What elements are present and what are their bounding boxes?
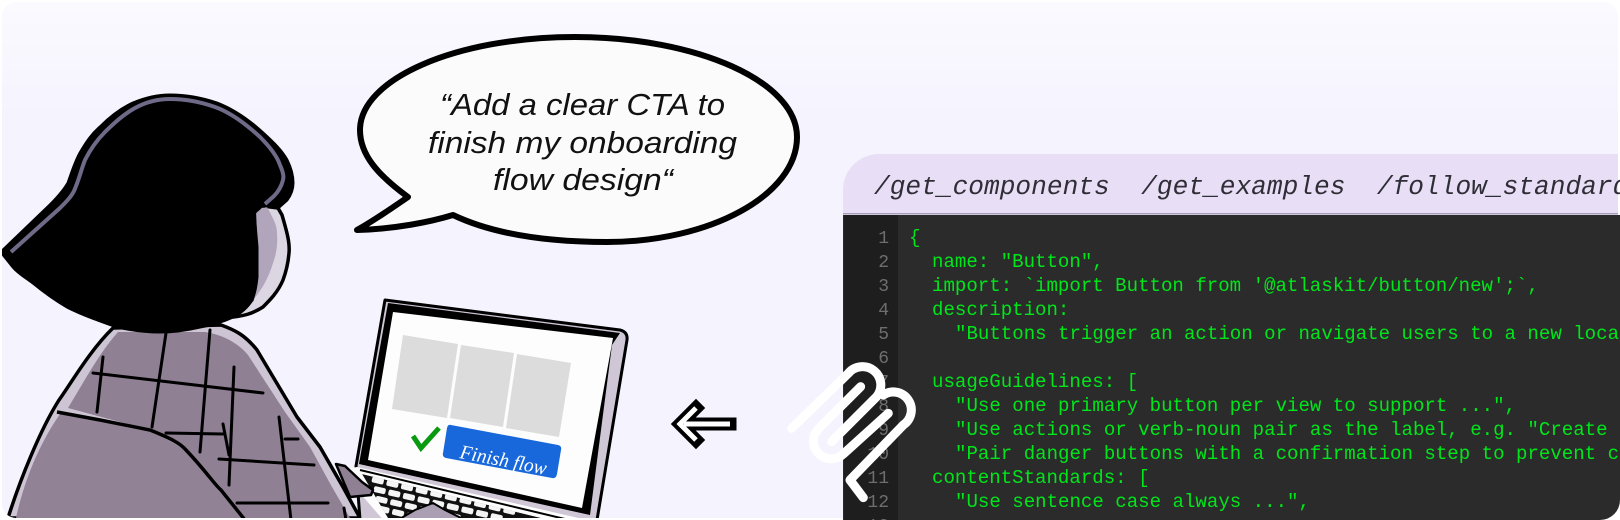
- JSON code: description:: [932, 299, 1069, 321]
- panel: code window: [843, 154, 1620, 520]
- illustration: person at laptop: [1, 95, 627, 520]
- speech text: “Add a clear CTA to: [440, 87, 725, 122]
- line number gutter: 7: [878, 373, 889, 393]
- JSON code: usageGuidelines: [: [932, 371, 1138, 393]
- icon: green check: [413, 428, 439, 448]
- speech bubble: [357, 37, 797, 242]
- line number gutter: 11: [867, 469, 889, 489]
- arrow pointing left: [680, 408, 730, 440]
- line number gutter: 12: [867, 493, 889, 513]
- JSON code: import: `import Button from '@atlaskit/button/new';`,: [932, 275, 1539, 297]
- speech text: finish my onboarding: [428, 125, 737, 160]
- JSON code: [909, 227, 1620, 513]
- line number gutter: 4: [878, 301, 889, 321]
- JSON code: "Use one primary button per view to support ...",: [955, 395, 1516, 417]
- code editor: [843, 215, 1620, 520]
- line number gutter: 6: [878, 349, 889, 369]
- face: [233, 205, 289, 317]
- JSON code: contentStandards: [: [932, 467, 1150, 489]
- line number gutter: 1: [878, 229, 889, 249]
- laptop screen: [368, 312, 613, 508]
- JSON code: "Use sentence case always ...",: [955, 491, 1310, 513]
- line number gutter: 9: [878, 421, 889, 441]
- button: Finish flow: [443, 425, 561, 480]
- hair: [1, 95, 293, 332]
- line number gutter: 2: [878, 253, 889, 273]
- speech text: flow design“: [493, 162, 675, 197]
- line number gutter: 3: [878, 277, 889, 297]
- tab bar with commands: [843, 154, 1620, 214]
- laptop: [336, 300, 627, 520]
- line number gutter: 8: [878, 397, 889, 417]
- line number gutter: 10: [867, 445, 889, 465]
- screen placeholder cards: [392, 335, 571, 437]
- line number gutter: [844, 215, 898, 520]
- body with plaid shawl: [8, 325, 360, 520]
- JSON code: name: "Button",: [932, 251, 1104, 273]
- keyboard: [336, 464, 596, 520]
- icon: paperclip: [792, 367, 911, 498]
- line number gutter: 5: [878, 325, 889, 345]
- JSON code: {: [909, 227, 920, 249]
- button: Finish flow: Finish flow: [457, 441, 549, 480]
- speech text: [428, 87, 737, 197]
